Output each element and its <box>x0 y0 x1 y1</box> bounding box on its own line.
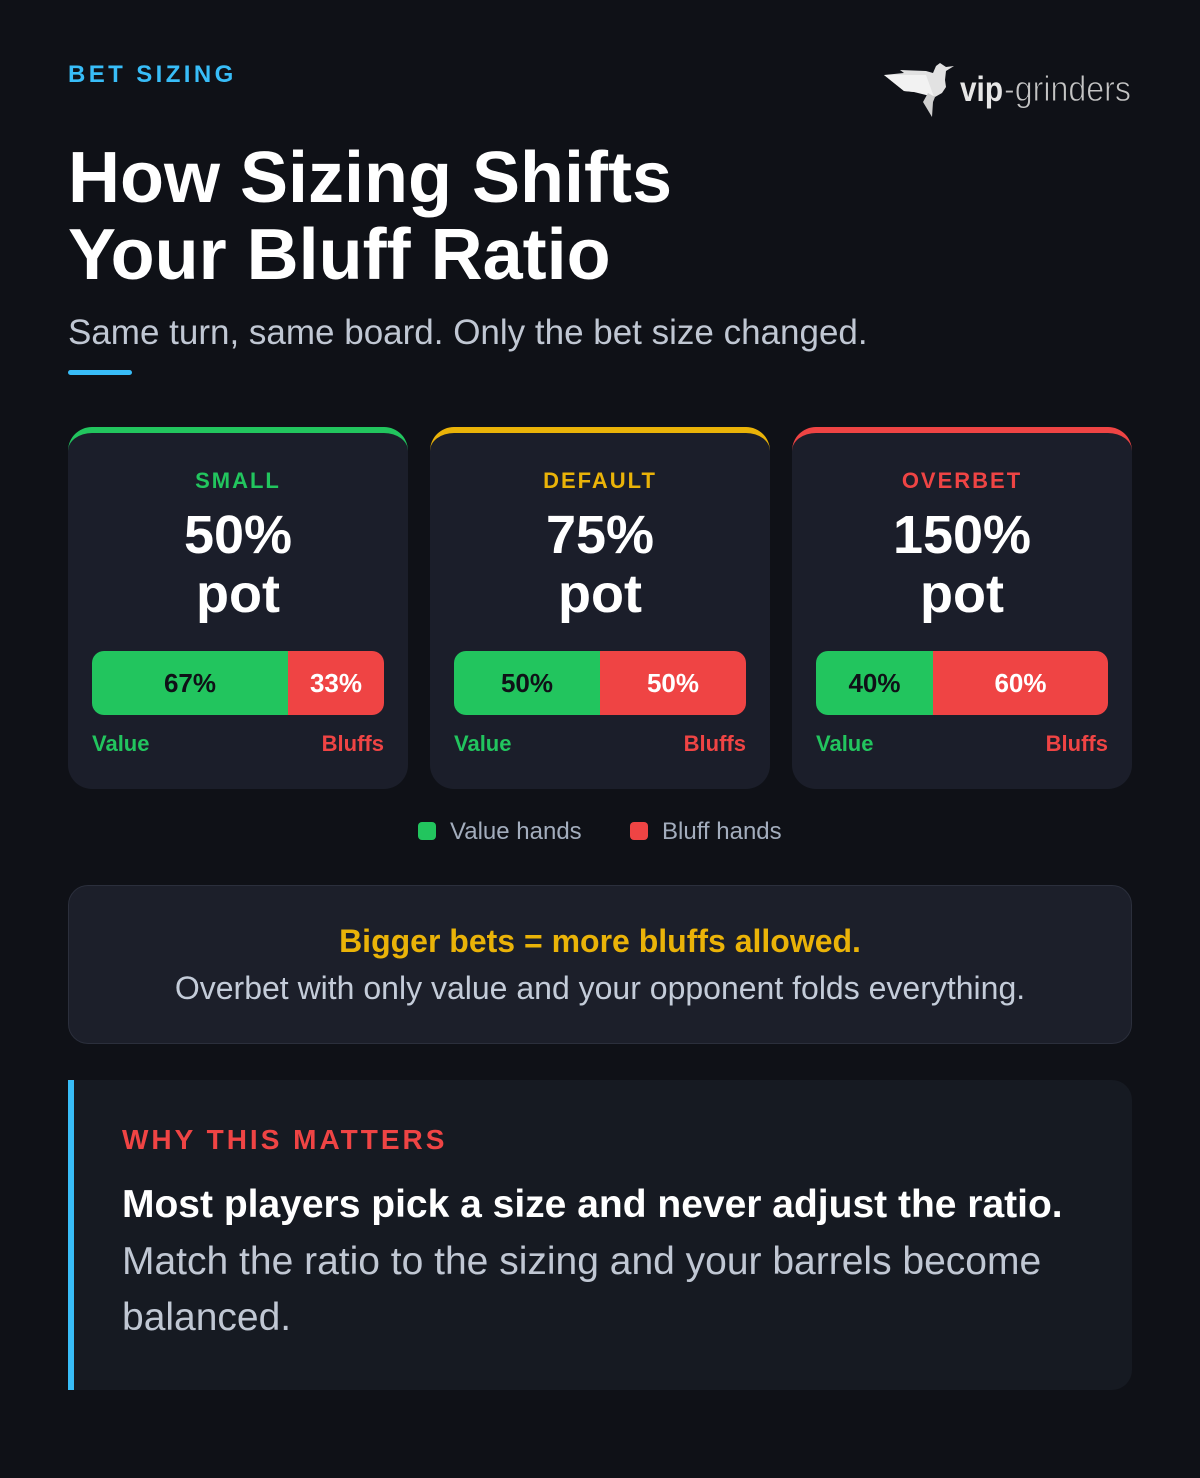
card label: SMALL <box>195 468 281 493</box>
bet size: pot <box>196 564 280 624</box>
stacked bar: 67/33: 33% <box>310 668 362 698</box>
bet size: pot <box>558 564 642 624</box>
stacked bar: 40/60: 60% <box>994 668 1047 698</box>
stacked bar: 50/50 <box>454 651 746 715</box>
bar labels <box>454 731 746 756</box>
panel: small bet card <box>68 427 408 789</box>
bet size: 50% <box>184 505 292 565</box>
panel: why this matters <box>68 1080 1132 1390</box>
stacked bar: 67/33: 67% <box>164 668 216 698</box>
logo wordmark: vip <box>960 70 1003 109</box>
icon: origami hummingbird <box>884 63 954 117</box>
logo: vip-grinders <box>884 63 1131 117</box>
legend <box>418 818 782 845</box>
legend swatch: value <box>418 822 436 840</box>
stacked bar: 50/50: 50% <box>501 668 553 698</box>
bet size <box>546 505 654 624</box>
subtitle: Same turn, same board. Only the bet size changed. <box>68 313 868 352</box>
title <box>68 138 672 295</box>
bar labels: Value <box>92 731 149 756</box>
bar labels <box>816 731 1108 756</box>
stacked bar: 40/60: 40% <box>848 668 901 698</box>
bar labels: Bluffs <box>322 731 384 756</box>
bet size <box>893 505 1031 624</box>
stacked bar: 67/33 <box>92 651 384 715</box>
title: How Sizing Shifts <box>68 138 672 218</box>
section body text: Match the ratio to the sizing and your barrels become <box>122 1240 1041 1282</box>
bar labels: Value <box>816 731 873 756</box>
card label: DEFAULT <box>543 468 657 493</box>
callout text: Overbet with only value and your opponent folds everything. <box>175 970 1025 1006</box>
section body text <box>122 1183 1063 1339</box>
panel: default bet card <box>430 427 770 789</box>
section heading: WHY THIS MATTERS <box>122 1124 447 1155</box>
bet size: 150% <box>893 505 1031 565</box>
card label: OVERBET <box>902 468 1022 493</box>
legend text: value: Value hands <box>450 818 582 845</box>
bet size: 75% <box>546 505 654 565</box>
legend text: bluff: Bluff hands <box>662 818 782 845</box>
panel: overbet card <box>792 427 1132 789</box>
bar labels <box>92 731 384 756</box>
eyebrow label: BET SIZING <box>68 61 237 88</box>
bar labels: Bluffs <box>1046 731 1108 756</box>
bet size <box>184 505 292 624</box>
bar labels: Bluffs <box>684 731 746 756</box>
section body text: Most players pick a size and never adjust the ratio. <box>122 1183 1063 1226</box>
legend swatch: bluff <box>630 822 648 840</box>
title: Your Bluff Ratio <box>68 215 611 295</box>
stacked bar: 50/50: 50% <box>647 668 699 698</box>
bet size: pot <box>920 564 1004 624</box>
callout headline: Bigger bets = more bluffs allowed. <box>339 923 861 959</box>
stacked bar: 40/60 <box>816 651 1108 715</box>
callout panel <box>68 885 1132 1044</box>
section body text: balanced. <box>122 1296 291 1339</box>
accent underline <box>68 370 132 375</box>
bar labels: Value <box>454 731 511 756</box>
